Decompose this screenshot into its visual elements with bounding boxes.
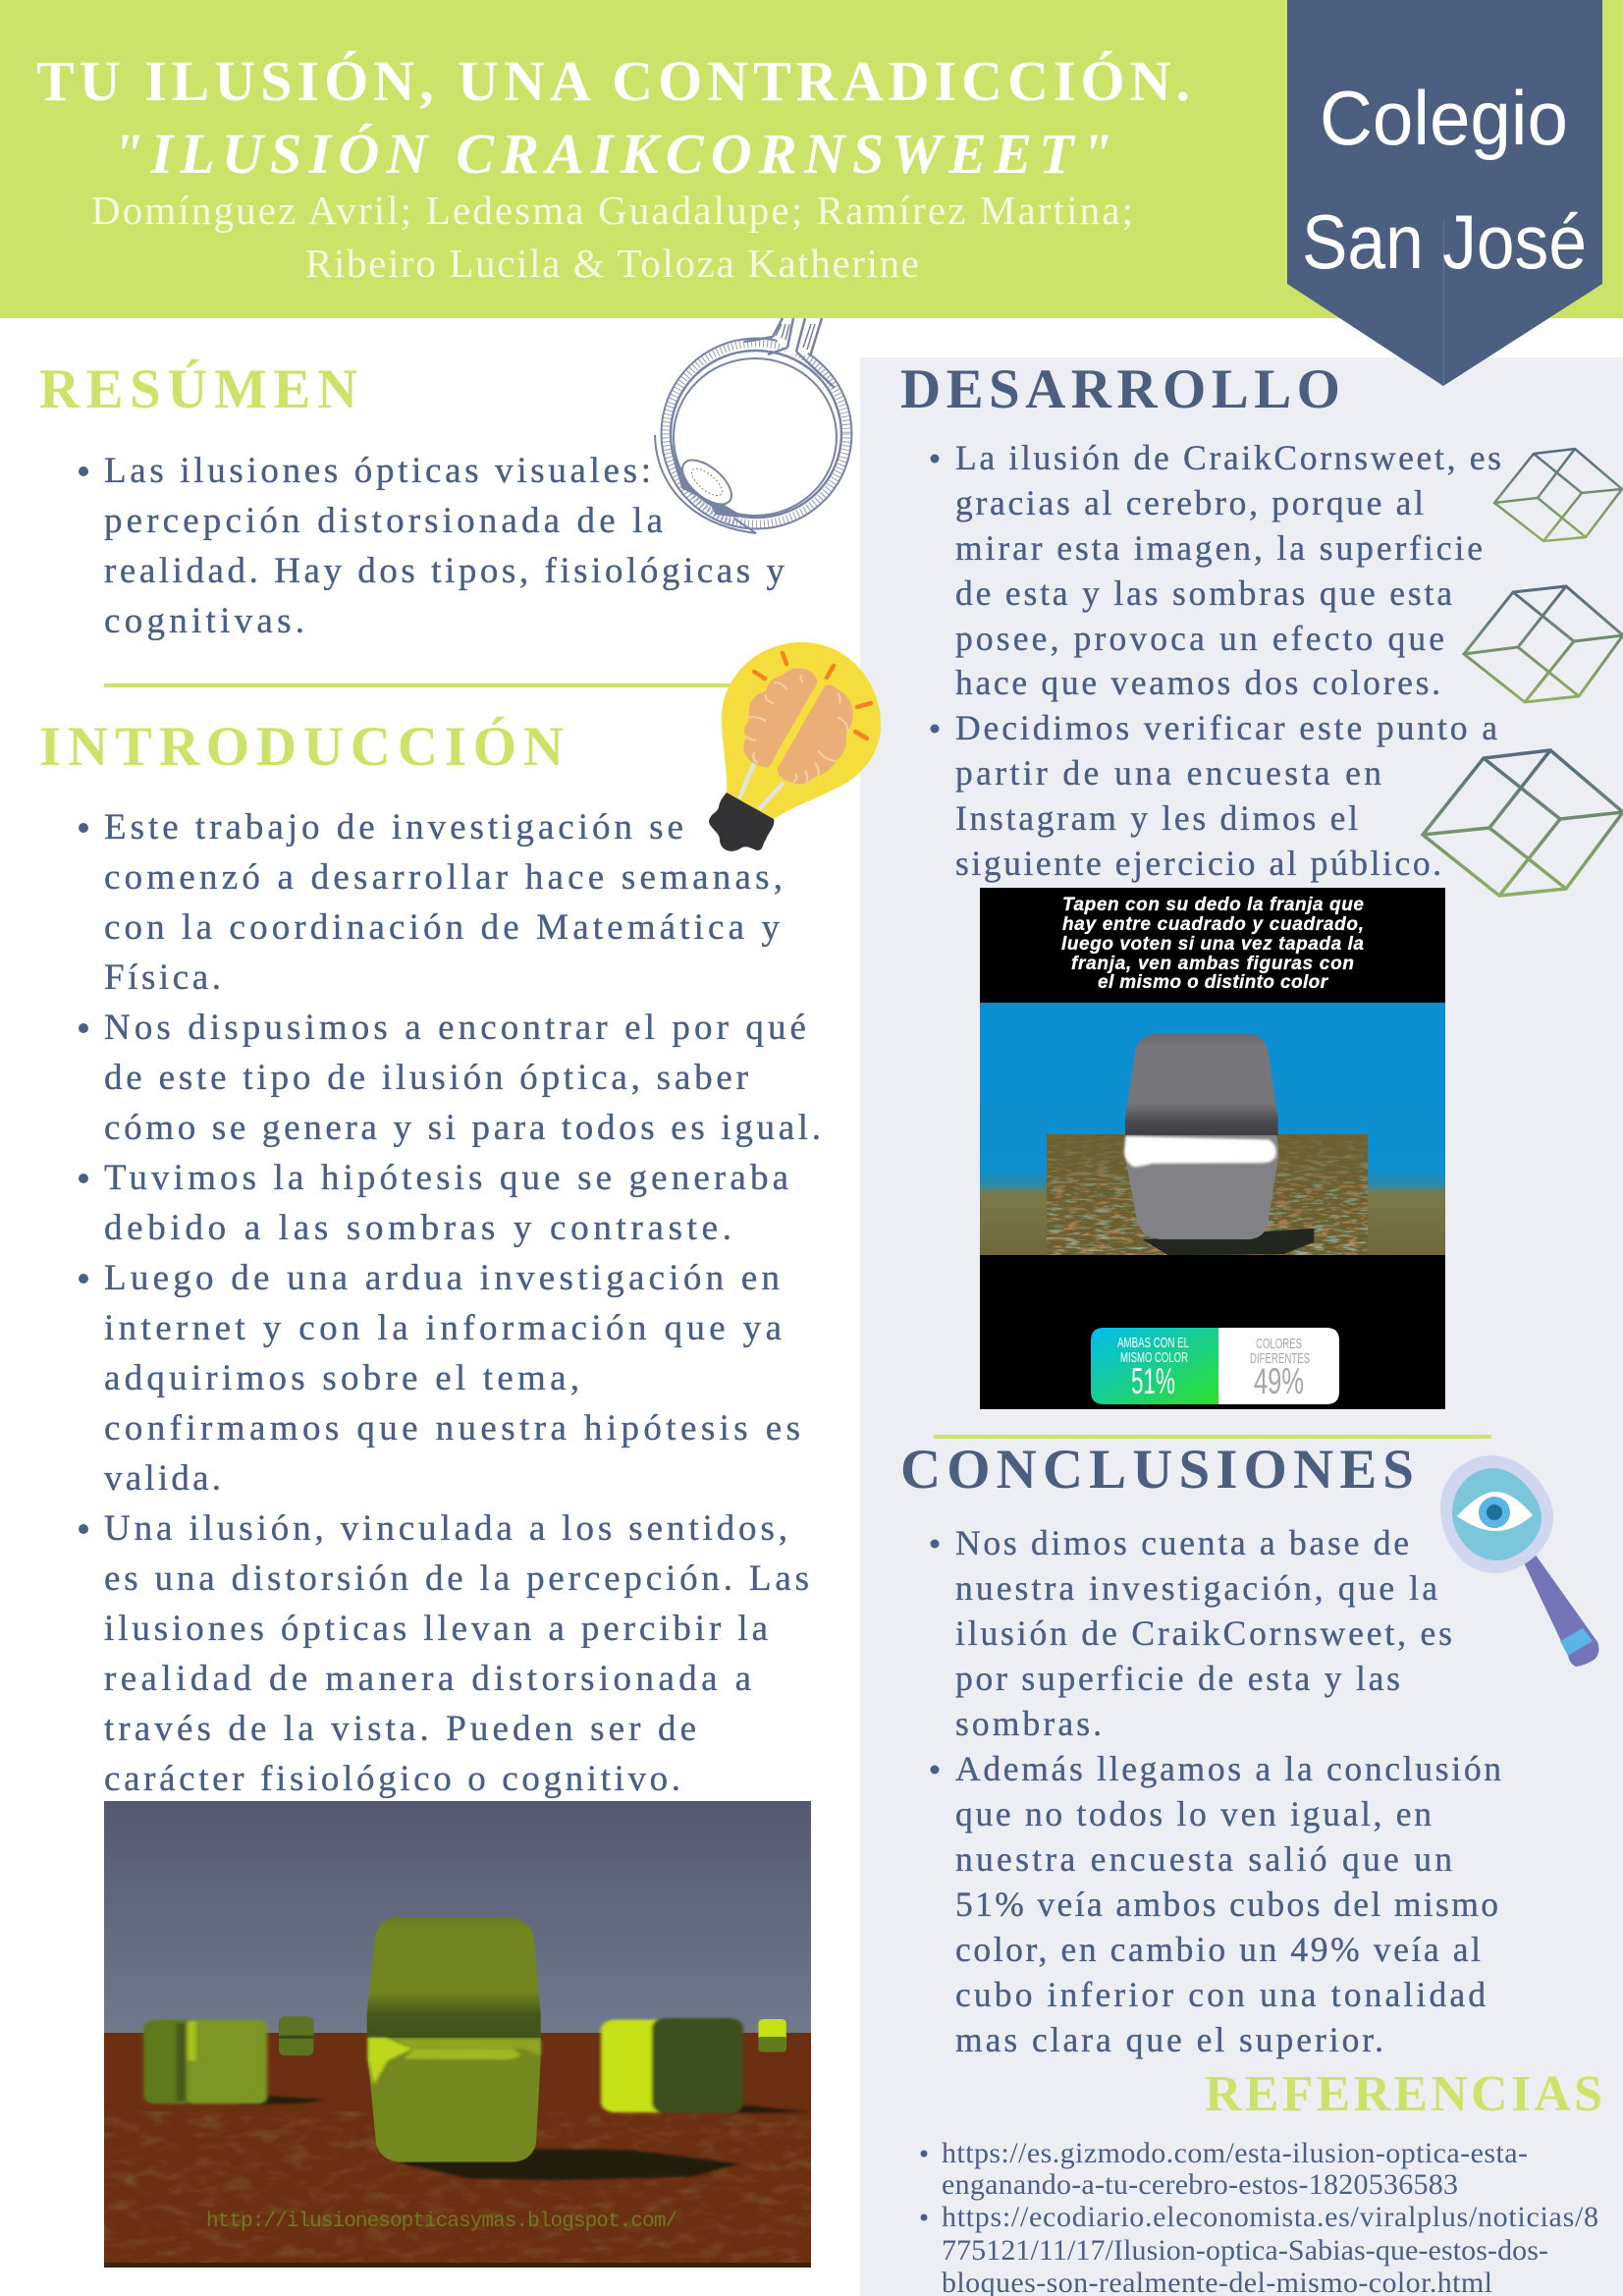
bullet: resultados de la encuesta: nuestra encuesta salió que un (955, 1839, 1452, 1879)
text block: resumen: realidad. Hay dos tipos, fisiológicas y (104, 551, 784, 591)
text block: resumen: cognitivas. (104, 601, 304, 641)
poll widget: DIFERENTES (1250, 1350, 1310, 1367)
bullet: encuesta: Instagram y les dimos el (955, 798, 1358, 838)
bullet: resultados de la encuesta: mas clara que el superior. (955, 2020, 1383, 2059)
central cube top (367, 1918, 541, 2038)
text block: conclusiones (931, 1523, 1501, 2059)
bullet: resultados de la encuesta: 51% veía ambos cubos del mismo (955, 1885, 1498, 1924)
bullet: objetivo: Nos dispusimos a encontrar el por qué (104, 1008, 806, 1048)
poll widget: MISMO COLOR (1120, 1349, 1188, 1366)
bullet: inicio del trabajo: comenzó a desarrollar hace semanas, (104, 857, 783, 898)
bullet: definicion: través de la vista. Pueden ser de (104, 1709, 696, 1749)
bullet: objetivo: cómo se genera y si para todos es igual. (104, 1108, 821, 1148)
bullet: investigacion: Luego de una ardua investigación en (104, 1258, 780, 1298)
shadows (238, 2096, 809, 2180)
bullet: encuesta: siguiente ejercicio al público. (955, 844, 1441, 883)
title: "ILUSIÓN CRAIKCORNSWEET" (112, 122, 1112, 186)
bullet: explicacion: hace que veamos dos colores. (955, 663, 1440, 702)
ribbon: school name (1287, 0, 1602, 386)
bullet: objetivo (79, 1008, 821, 1148)
bullet: investigacion: adquirimos sobre el tema, (104, 1358, 579, 1398)
reference 1 (921, 2137, 1528, 2201)
poll widget: 49% (1254, 1361, 1304, 1401)
heading: desarrollo: DESARROLLO (900, 358, 1340, 420)
bullet: definicion (79, 1508, 809, 1799)
heading: referencias: REFERENCIAS (1205, 2066, 1602, 2122)
bullet: investigacion: confirmamos que nuestra hipótesis es (104, 1408, 800, 1449)
bullet: definicion: ilusiones ópticas llevan a percibir la (104, 1609, 768, 1649)
icon: eye anatomy (655, 318, 852, 533)
bullet: inicio del trabajo: con la coordinación de Matemática y (104, 907, 781, 948)
bullet: investigacion (79, 1258, 800, 1499)
left cube (143, 2020, 267, 2104)
bullet: superficie y sombras: por superficie de esta y las (955, 1659, 1400, 1698)
icon: wireframe cube 1 (1494, 449, 1622, 541)
heading: conclusiones: CONCLUSIONES (900, 1439, 1414, 1501)
divider: resumen / introduccion (104, 683, 737, 687)
bullet: explicacion: La ilusión de CraikCornsweet, es (955, 438, 1501, 477)
poll widget: 51% (1131, 1361, 1175, 1401)
bullet: investigacion: internet y con la información que ya (104, 1308, 782, 1348)
bottom cube (1124, 1135, 1278, 1239)
text block: referencias (921, 2137, 1598, 2296)
ribbon: school name: Colegio (1320, 75, 1568, 161)
bullet: resultados de la encuesta: que no todos lo ven igual, en (955, 1794, 1432, 1833)
heading: introduccion: INTRODUCCIÓN (39, 716, 564, 778)
icon: wireframe cube 2 (1464, 586, 1623, 702)
right cube (601, 2018, 743, 2113)
authors: Ribeiro Lucila & Toloza Katherine (305, 241, 919, 286)
icon: magnifying glass with eye (1440, 1455, 1598, 1667)
bullet: explicacion: mirar esta imagen, la superficie (955, 528, 1483, 568)
bullet: objetivo: de este tipo de ilusión óptica, saber (104, 1058, 748, 1098)
bullet: definicion: es una distorsión de la percepción. Las (104, 1558, 809, 1599)
bullet: definicion: carácter fisiológico o cognitivo. (104, 1759, 680, 1799)
bullet: explicacion (931, 438, 1501, 702)
header banner (0, 0, 1623, 318)
bullet: superficie y sombras: ilusión de CraikCornsweet, es (955, 1613, 1452, 1653)
bullet: investigacion: valida. (104, 1458, 221, 1499)
poll widget: AMBAS CON EL (1117, 1335, 1189, 1351)
watermark url: http://ilusionesopticasymas.blogspot.com/ (206, 2211, 677, 2233)
reference 1: enganando-a-tu-cerebro-estos-1820536583 (942, 2168, 1458, 2201)
bullet: superficie y sombras (931, 1523, 1452, 1743)
bullet: resultados de la encuesta: color, en cambio un 49% veía al (955, 1930, 1481, 1969)
bullet: inicio del trabajo: Física. (104, 957, 221, 998)
text block: desarrollo (931, 438, 1501, 883)
divider: poll / conclusiones (934, 1435, 1491, 1439)
textured floor (1047, 1134, 1368, 1255)
top cube (1125, 1034, 1278, 1135)
reference 2: 775121/11/17/Ilusion-optica-Sabias-que-estos-dos- (942, 2234, 1548, 2267)
poll question: franja, ven ambas figuras con (1071, 954, 1354, 974)
title (36, 49, 1190, 186)
bullet: inicio del trabajo: Este trabajo de investigación se (104, 807, 683, 847)
photo: green cubes illusion (104, 1801, 811, 2268)
poll question: Tapen con su dedo la franja que (1062, 895, 1364, 915)
authors: Domínguez Avril; Ledesma Guadalupe; Ramírez Martina; (91, 188, 1133, 233)
bullet: superficie y sombras: Nos dimos cuenta a base de (955, 1523, 1409, 1562)
icon: wireframe cube 3 (1423, 750, 1623, 896)
authors (91, 188, 1133, 286)
bullet: resultados de la encuesta (931, 1749, 1501, 2059)
bullet: hipotesis: Tuvimos la hipótesis que se generaba (104, 1158, 788, 1198)
bullet: definicion: realidad de manera distorsionada a (104, 1659, 751, 1699)
cubes (1124, 1034, 1314, 1255)
bullet: encuesta (931, 708, 1497, 883)
bullet: hipotesis: debido a las sombras y contraste. (104, 1208, 731, 1248)
poll widget: COLORES (1256, 1336, 1302, 1352)
panel: right column background (860, 357, 1623, 2296)
bullet: superficie y sombras: nuestra investigación, que la (955, 1568, 1437, 1608)
reference 1: https://es.gizmodo.com/esta-ilusion-optica-esta- (942, 2137, 1528, 2169)
icon: light bulb with brain (709, 642, 881, 851)
poll question: el mismo o distinto color (1098, 972, 1329, 993)
poll question: hay entre cuadrado y cuadrado, (1062, 914, 1364, 935)
cube shadow (1142, 1229, 1314, 1255)
bullet: definicion: Una ilusión, vinculada a los sentidos, (104, 1508, 787, 1549)
bullet: encuesta: Decidimos verificar este punto a (955, 708, 1497, 747)
bullet: resultados de la encuesta: cubo inferior con una tonalidad (955, 1975, 1486, 2014)
brain (743, 668, 853, 785)
small right cube (758, 2019, 786, 2051)
bullet: explicacion: gracias al cerebro, porque al (955, 483, 1424, 522)
photo scene shapes (143, 1918, 809, 2180)
bullet: resultados de la encuesta: Además llegamos a la conclusión (955, 1749, 1501, 1788)
bullet: explicacion: de esta y las sombras que esta (955, 574, 1452, 613)
small left cube (279, 2016, 313, 2055)
heading: resumen: RESÚMEN (39, 358, 357, 420)
ribbon: school name: San José (1302, 198, 1587, 285)
poll widget (1091, 1328, 1339, 1404)
image: instagram poll (980, 888, 1445, 1409)
text block: introduccion (79, 807, 821, 1799)
text block: resumen (79, 451, 784, 641)
reference 2 (921, 2201, 1598, 2296)
text block: resumen: Las ilusiones ópticas visuales: (104, 451, 651, 491)
poll question (1061, 895, 1364, 993)
poll question: luego voten si una vez tapada la (1061, 934, 1364, 955)
bullet: inicio del trabajo (79, 807, 783, 998)
bullet: hipotesis (79, 1158, 788, 1248)
bullet: explicacion: posee, provoca un efecto que (955, 619, 1444, 658)
bullet: superficie y sombras: sombras. (955, 1704, 1102, 1743)
title: TU ILUSIÓN, UNA CONTRADICCIÓN. (36, 49, 1190, 113)
bullet: encuesta: partir de una encuesta en (955, 753, 1381, 793)
text block: resumen: percepción distorsionada de la (104, 501, 663, 541)
central cube bottom (368, 2038, 541, 2162)
reference 2: https://ecodiario.eleconomista.es/viralplus/noticias/8 (942, 2201, 1598, 2233)
